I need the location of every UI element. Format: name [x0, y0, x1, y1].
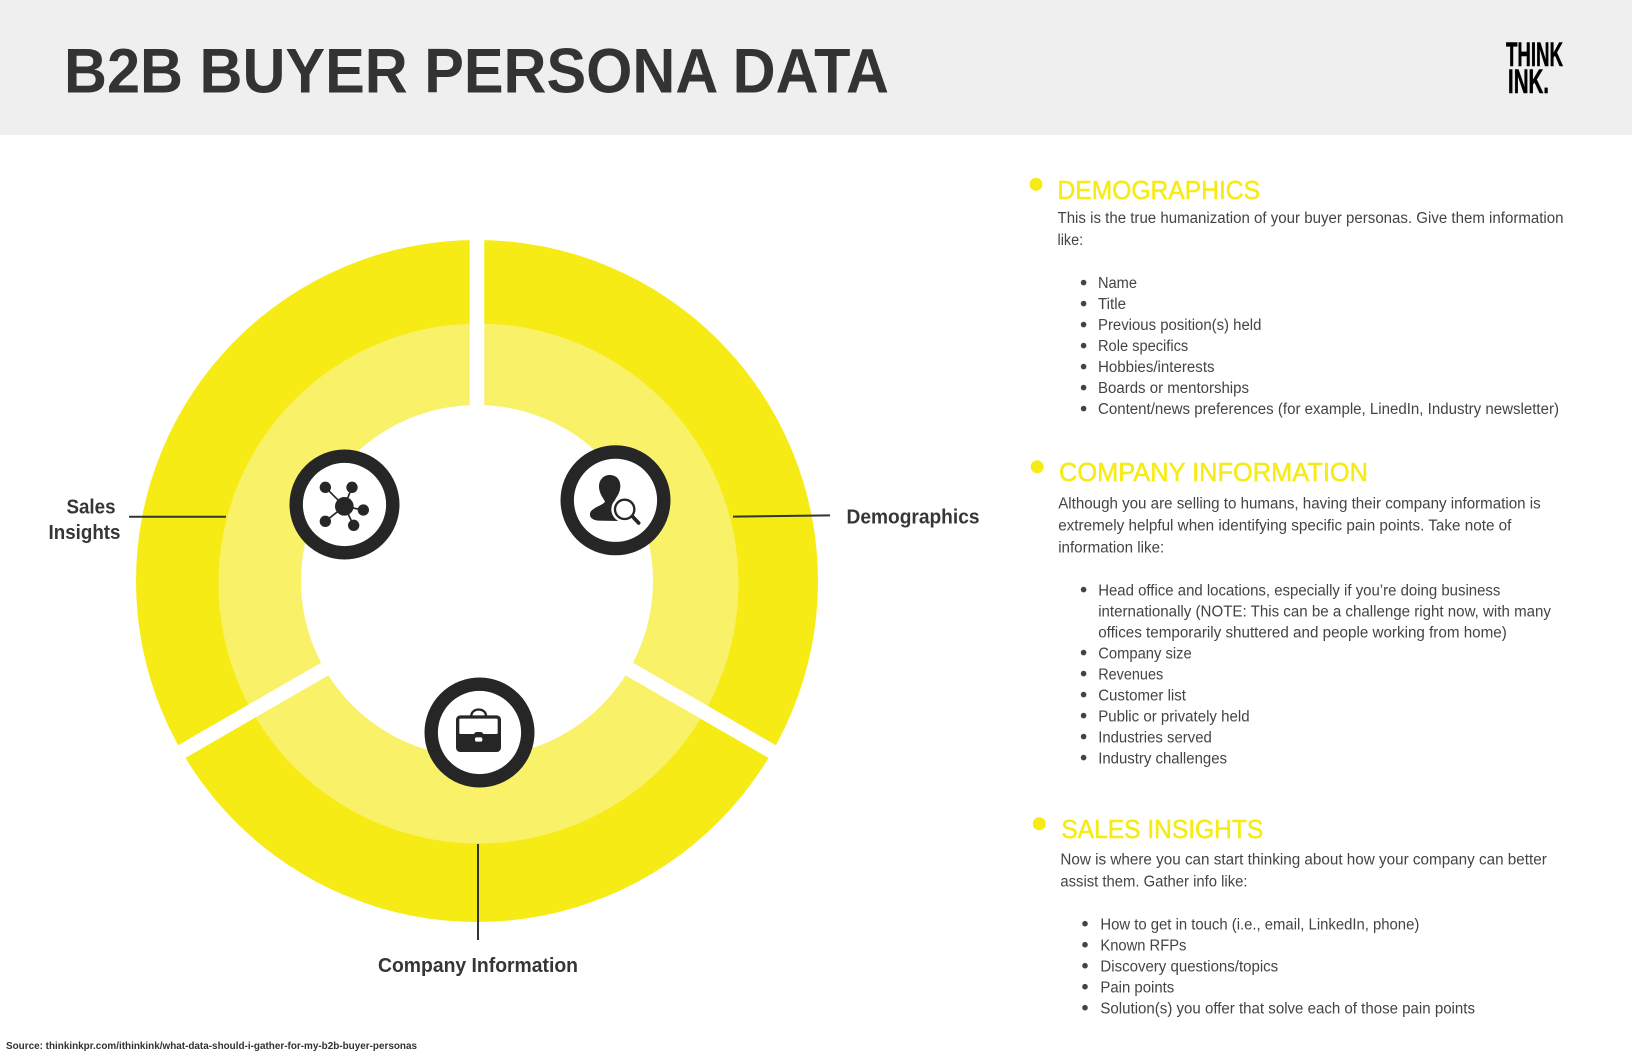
list: internationally (NOTE: This can be a challenge right now, with many: [1098, 603, 1551, 620]
list: offices temporarily shuttered and people working from home): [1098, 624, 1507, 641]
intro text: Now is where you can start thinking about how your company can better: [1060, 851, 1547, 868]
list: Head office and locations, especially if you’re doing business: [1098, 582, 1501, 599]
list: Industries served: [1098, 729, 1212, 746]
list: [1081, 275, 1559, 418]
intro text: Although you are selling to humans, having their company information is: [1058, 495, 1541, 512]
intro text: assist them. Gather info like:: [1060, 873, 1248, 890]
logo: Think Ink: [1506, 36, 1563, 101]
logo: Think Ink: THINK: [1506, 36, 1563, 74]
source note: Source: thinkinkpr.com/ithinkink/what-data-should-i-gather-for-my-b2b-buyer-personas: [6, 1041, 417, 1052]
list: Title: [1098, 296, 1126, 313]
intro text: like:: [1058, 232, 1083, 249]
intro text: extremely helpful when identifying specific pain points. Take note of: [1058, 517, 1512, 534]
segment gaps: [169, 225, 785, 759]
icon: briefcase (company information): [431, 684, 528, 781]
label: Demographics: Demographics: [846, 506, 980, 528]
intro text: This is the true humanization of your buyer personas. Give them information: [1058, 210, 1564, 227]
list: Known RFPs: [1100, 937, 1187, 954]
list: Customer list: [1098, 687, 1187, 704]
list: Company size: [1098, 645, 1192, 662]
outer ring: [136, 240, 818, 922]
panel: demographics: [1030, 175, 1564, 418]
bullet dot: [1033, 817, 1046, 830]
label: Company Information: Company Information: [378, 955, 578, 977]
logo: Think Ink: INK.: [1508, 63, 1549, 101]
panel: company information: [1031, 457, 1551, 767]
list: Content/news preferences (for example, LinedIn, Industry newsletter): [1098, 401, 1559, 418]
heading: DEMOGRAPHICS: [1058, 175, 1260, 205]
icon: network (sales insights): [296, 456, 393, 553]
list: Role specifics: [1098, 338, 1188, 355]
panel: sales insights: [1033, 814, 1547, 1017]
list: Public or privately held: [1098, 708, 1250, 725]
list: Previous position(s) held: [1098, 317, 1261, 334]
list: Industry challenges: [1098, 750, 1227, 767]
inner white circle: [301, 405, 653, 757]
list: [1081, 582, 1551, 767]
list: Solution(s) you offer that solve each of those pain points: [1100, 1000, 1475, 1017]
donut chart: [136, 225, 818, 922]
icon: person with magnifier (demographics): [567, 452, 664, 549]
title: B2B BUYER PERSONA DATA: [64, 36, 889, 106]
bullet dot: [1031, 460, 1044, 473]
list: Discovery questions/topics: [1100, 958, 1278, 975]
list: Pain points: [1100, 979, 1175, 996]
list: [1082, 916, 1475, 1017]
intro text: information like:: [1058, 539, 1164, 556]
heading: COMPANY INFORMATION: [1059, 457, 1368, 487]
middle ring: [218, 324, 738, 844]
intro text: [1058, 210, 1564, 249]
intro text: [1060, 851, 1547, 890]
bullet dot: [1030, 178, 1042, 191]
list: Boards or mentorships: [1098, 380, 1249, 397]
list: Hobbies/interests: [1098, 359, 1215, 376]
intro text: [1058, 495, 1541, 556]
label: Sales Insights: Sales: [66, 496, 116, 518]
list: How to get in touch (i.e., email, LinkedIn, phone): [1100, 916, 1419, 933]
list: Name: [1098, 275, 1137, 292]
label: Sales Insights: Insights: [48, 522, 120, 544]
label: Sales Insights: [48, 496, 226, 544]
header band: [0, 0, 1632, 135]
list: Revenues: [1098, 666, 1163, 683]
heading: SALES INSIGHTS: [1061, 814, 1263, 844]
